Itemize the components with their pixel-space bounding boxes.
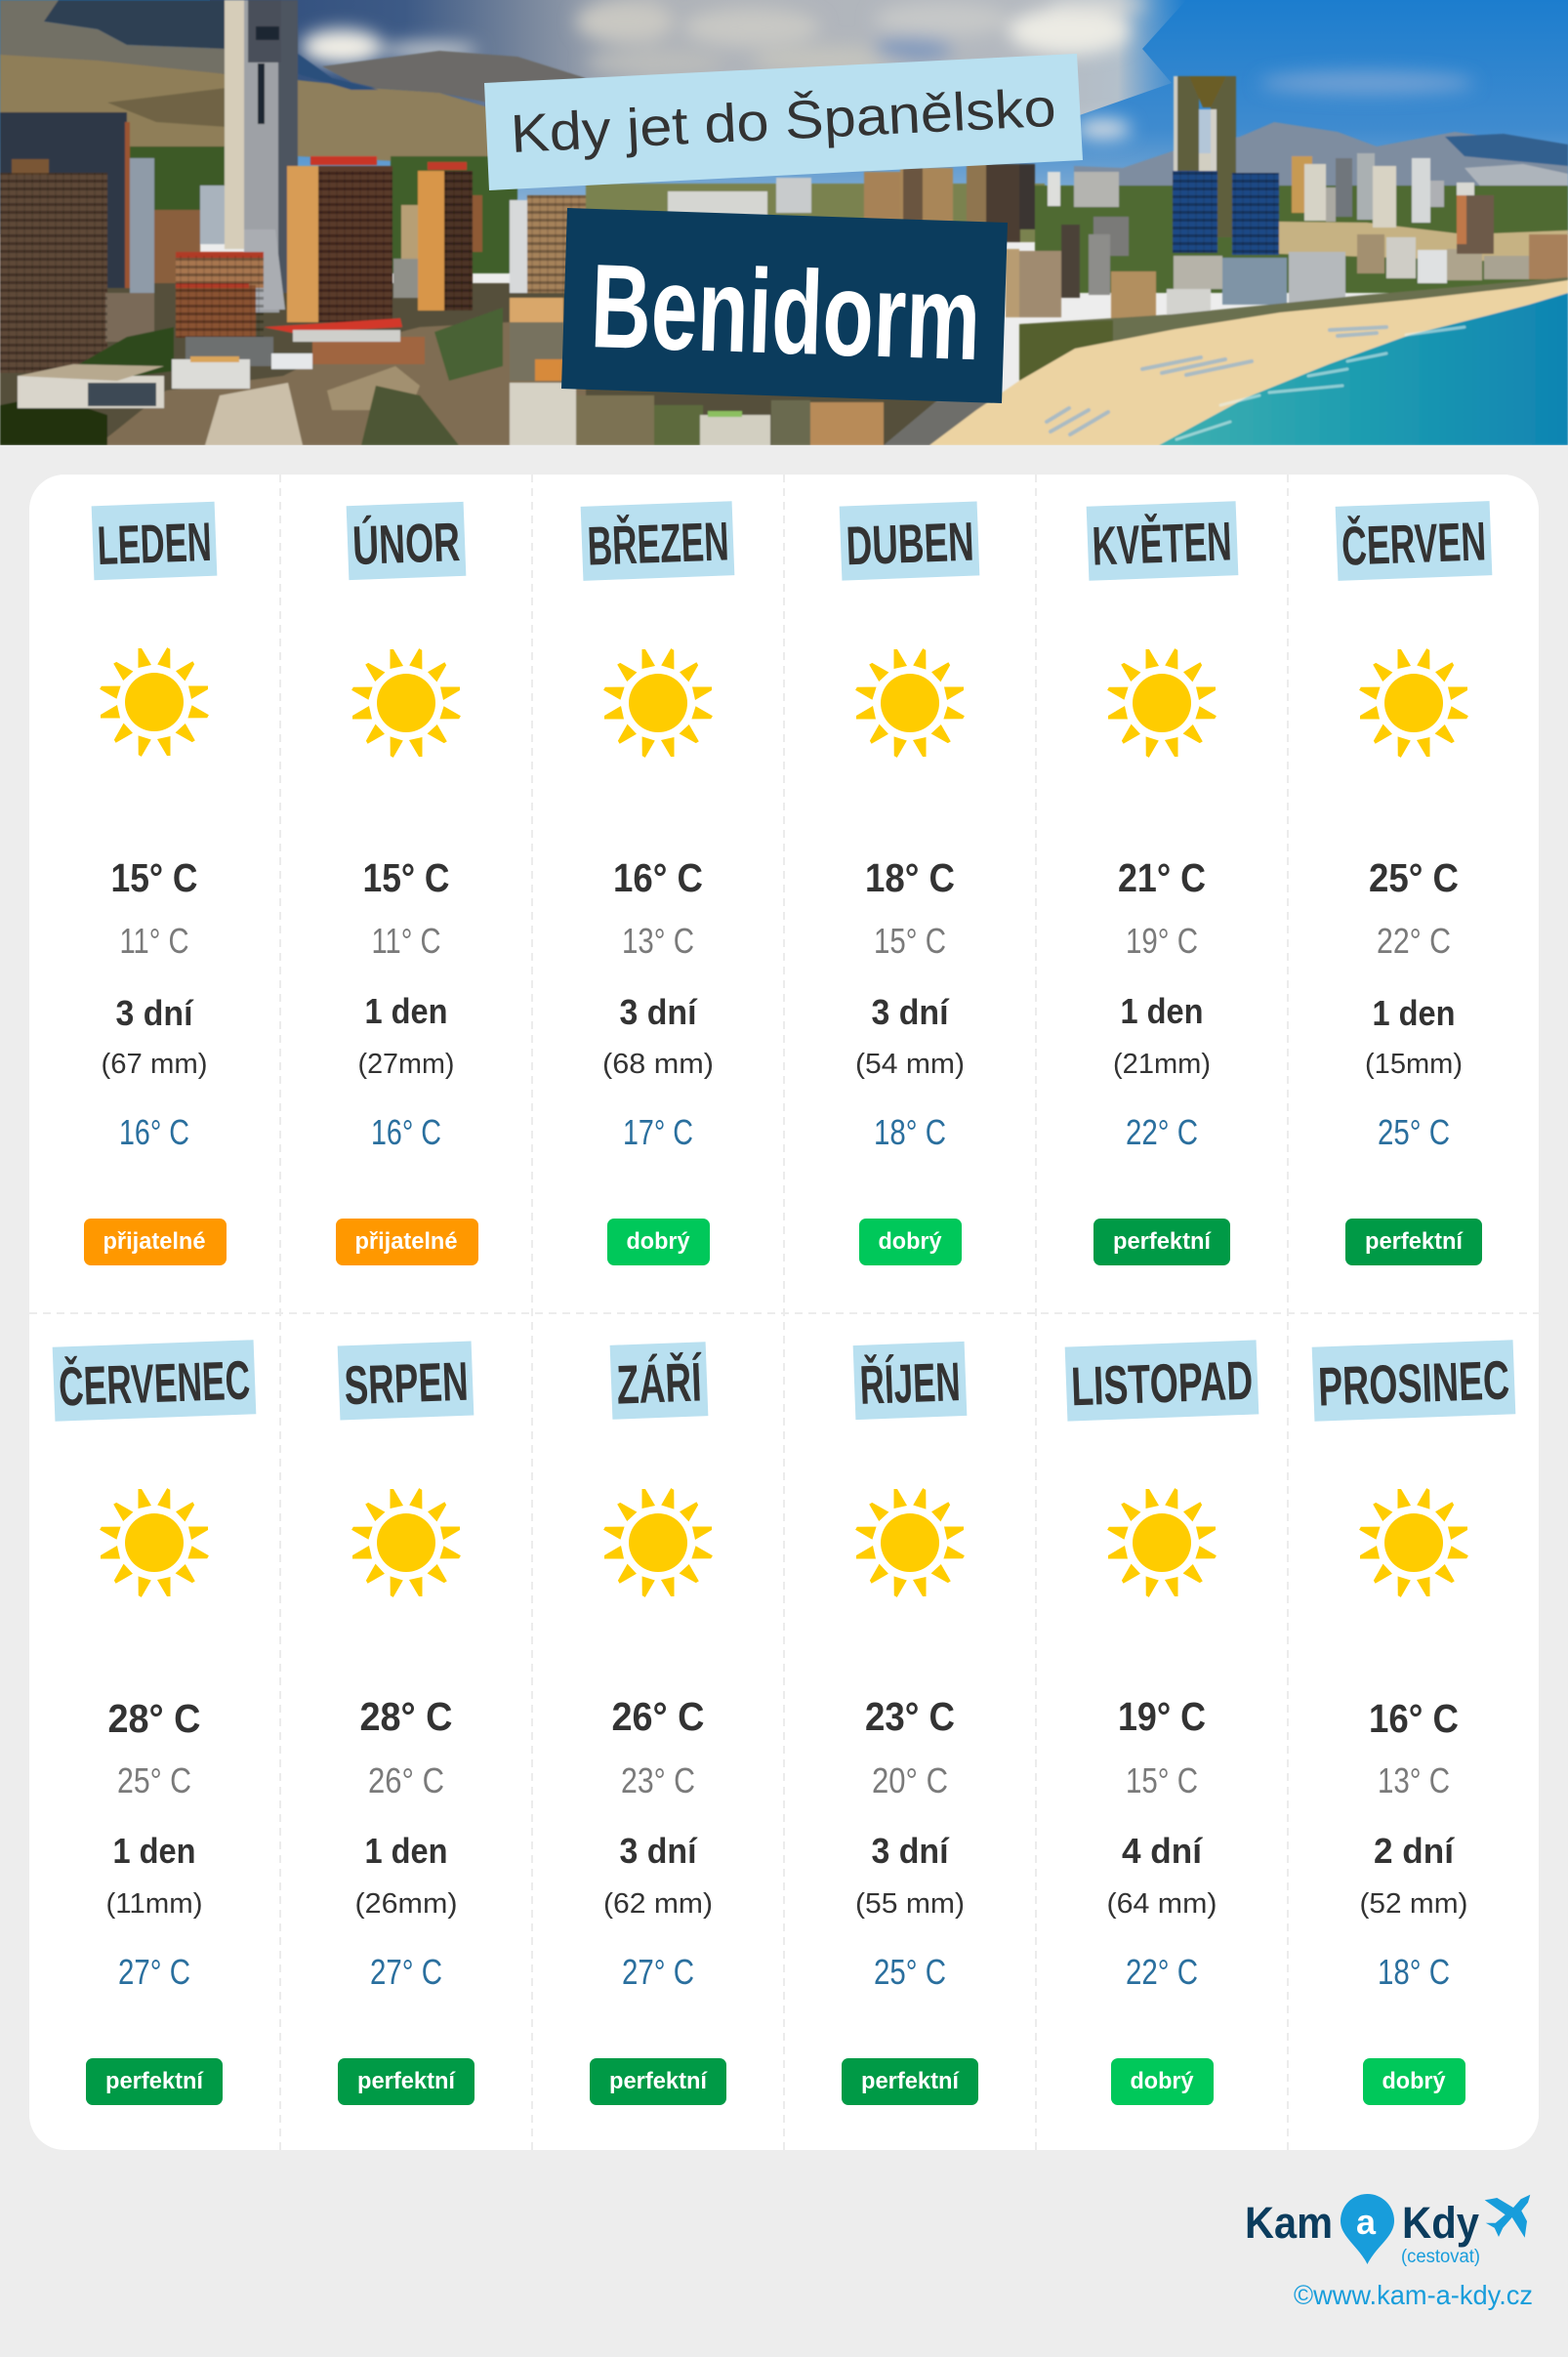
heading: DUBEN: DUBEN — [845, 511, 975, 576]
air temperature night: 23° C — [621, 1760, 695, 1800]
icon: sun — [100, 647, 209, 757]
heading: BŘEZEN: BŘEZEN — [586, 510, 730, 577]
sea temperature: 27° C — [370, 1952, 442, 1992]
sea temperature: 27° C — [622, 1952, 694, 1992]
sea — [1159, 293, 1568, 445]
rainfall: (68 mm) — [602, 1049, 714, 1080]
rating badge: dobrý — [1382, 2068, 1446, 2094]
rating badge — [336, 1219, 478, 1265]
window texture — [0, 173, 107, 373]
heading: LISTOPAD: LISTOPAD — [1070, 1349, 1254, 1417]
rating badge: perfektní — [357, 2068, 456, 2094]
heading: SRPEN — [338, 1342, 474, 1421]
heading: LEDEN — [92, 502, 217, 580]
heading: ÚNOR — [347, 502, 466, 580]
lower centre houses — [510, 298, 563, 325]
air temperature night: 25° C — [117, 1760, 191, 1800]
icon: sun — [351, 1488, 461, 1597]
month: březen — [581, 501, 734, 1265]
month: červen — [1336, 501, 1492, 1265]
rainy days: 4 dní — [1122, 1831, 1203, 1871]
air temperature day: 15° C — [363, 855, 449, 900]
sea temperature: 27° C — [118, 1952, 190, 1992]
rating badge — [1345, 1219, 1482, 1265]
tower — [225, 0, 244, 249]
rainfall: (15mm) — [1365, 1049, 1463, 1080]
beach — [929, 280, 1568, 445]
rainy days: 1 den — [365, 991, 447, 1031]
sea temperature: 22° C — [1126, 1112, 1198, 1152]
icon: sun — [603, 1488, 713, 1597]
rainy days: 2 dní — [1374, 1831, 1455, 1871]
rating badge — [1363, 2058, 1465, 2105]
rating badge: přijatelné — [103, 1228, 205, 1255]
logo word: Kam: Kam — [1245, 2198, 1333, 2248]
heading: LEDEN: LEDEN — [96, 511, 213, 576]
rating badge: perfektní — [1365, 1228, 1464, 1255]
right lower buildings — [1019, 251, 1061, 317]
rating badge: dobrý — [879, 1228, 942, 1255]
left tall buildings — [0, 112, 127, 288]
air temperature night: 15° C — [874, 921, 946, 961]
sea temperature: 22° C — [1126, 1952, 1198, 1992]
panel: monthly weather table — [29, 475, 1539, 2150]
icon: sun — [1107, 1488, 1217, 1597]
rainfall: (64 mm) — [1106, 1888, 1217, 1920]
heading: ČERVENEC: ČERVENEC — [58, 1348, 251, 1418]
centre buildings behind title — [666, 189, 769, 215]
air temperature day: 16° C — [1369, 1696, 1459, 1741]
rating badge — [842, 2058, 978, 2105]
month: září — [590, 1342, 726, 2105]
rating badge: perfektní — [609, 2068, 708, 2094]
month: prosinec — [1312, 1340, 1515, 2105]
rating badge — [1111, 2058, 1214, 2105]
icon: sun — [1107, 648, 1217, 758]
icon: sun — [603, 648, 713, 758]
rainy days: 1 den — [365, 1831, 447, 1871]
sea temperature: 16° C — [371, 1112, 441, 1152]
heading: BŘEZEN — [581, 501, 734, 581]
air temperature day: 28° C — [359, 1694, 453, 1739]
rating badge — [86, 2058, 223, 2105]
air temperature night: 11° C — [371, 921, 441, 961]
heading: ZÁŘÍ — [610, 1342, 708, 1420]
rainy days: 3 dní — [619, 992, 697, 1032]
rainy days: 3 dní — [871, 992, 949, 1032]
website link: ©www.kam-a-kdy.cz — [1294, 2280, 1533, 2310]
heading: ČERVENEC — [53, 1340, 256, 1422]
air temperature night: 19° C — [1126, 921, 1198, 961]
title: Benidorm — [561, 208, 1008, 403]
air temperature night: 11° C — [119, 921, 189, 961]
rainy days: 1 den — [1373, 993, 1455, 1033]
rainfall: (52 mm) — [1359, 1888, 1468, 1920]
rating badge: perfektní — [861, 2068, 960, 2094]
air temperature day: 19° C — [1118, 1694, 1206, 1739]
sea temperature: 18° C — [874, 1112, 946, 1152]
heading: LISTOPAD — [1065, 1340, 1259, 1422]
rainfall: (21mm) — [1113, 1049, 1211, 1080]
rainfall: (55 mm) — [855, 1888, 965, 1920]
air temperature day: 23° C — [865, 1694, 955, 1739]
orange towers — [287, 166, 318, 322]
sea temperature: 16° C — [119, 1112, 189, 1152]
icon: sun — [351, 648, 461, 758]
icon: map pin — [1341, 2194, 1394, 2264]
heading: SRPEN: SRPEN — [343, 1350, 470, 1416]
rainfall: (54 mm) — [855, 1049, 965, 1080]
rainfall: (27mm) — [357, 1049, 455, 1080]
banner: subtitle: Kdy jet do Španělsko — [510, 77, 1057, 164]
heading: KVĚTEN — [1087, 501, 1238, 581]
title: Benidorm: Benidorm — [589, 239, 982, 385]
logo word: Kdy: Kdy — [1402, 2198, 1479, 2248]
header photo: Benidorm skyline and beach — [0, 0, 1568, 445]
month: květen — [1087, 501, 1238, 1265]
rating badge: dobrý — [627, 1228, 690, 1255]
rainfall: (11mm) — [106, 1888, 202, 1920]
air temperature night: 26° C — [368, 1760, 444, 1800]
rating badge — [607, 1219, 710, 1265]
rating badge: dobrý — [1131, 2068, 1194, 2094]
icon: sun — [1359, 648, 1468, 758]
rating badge — [1093, 1219, 1230, 1265]
rainfall: (26mm) — [355, 1888, 457, 1920]
icon: sun — [855, 1488, 965, 1597]
logo: Kam a Kdy — [1245, 2194, 1530, 2267]
heading: ČERVEN — [1336, 501, 1492, 581]
icon: sun — [100, 1488, 209, 1597]
heading: ŘÍJEN: ŘÍJEN — [858, 1350, 962, 1416]
Intempo — [1174, 76, 1199, 174]
rainy days: 3 dní — [871, 1831, 949, 1871]
rainfall: (67 mm) — [102, 1049, 207, 1080]
rating badge: perfektní — [1113, 1228, 1212, 1255]
air temperature night: 13° C — [1378, 1760, 1450, 1800]
air temperature day: 15° C — [111, 855, 197, 900]
air temperature day: 21° C — [1118, 855, 1206, 900]
banner: subtitle — [484, 54, 1083, 190]
rainy days: 3 dní — [115, 993, 193, 1033]
air temperature night: 20° C — [872, 1760, 948, 1800]
air temperature night: 13° C — [622, 921, 694, 961]
rainfall: (62 mm) — [603, 1888, 713, 1920]
rating badge: perfektní — [105, 2068, 204, 2094]
icon: sun — [1359, 1488, 1468, 1597]
air temperature day: 26° C — [611, 1694, 705, 1739]
sea temperature: 25° C — [874, 1952, 946, 1992]
logo tagline: (cestovat) — [1401, 2247, 1480, 2267]
air temperature day: 25° C — [1369, 855, 1459, 900]
rainy days: 3 dní — [619, 1831, 697, 1871]
vegetation bands — [129, 145, 226, 211]
heading: ZÁŘÍ: ZÁŘÍ — [615, 1350, 704, 1416]
air temperature day: 18° C — [865, 855, 955, 900]
rating badge — [859, 1219, 962, 1265]
air temperature day: 16° C — [613, 855, 703, 900]
month: srpen — [338, 1342, 475, 2105]
rating badge — [338, 2058, 475, 2105]
icon: map pin: a — [1356, 2202, 1377, 2242]
air temperature day: 28° C — [107, 1696, 201, 1741]
heading: KVĚTEN: KVĚTEN — [1091, 510, 1233, 577]
month: listopad — [1065, 1340, 1259, 2105]
month: červenec — [53, 1340, 256, 2105]
rating badge: přijatelné — [355, 1228, 457, 1255]
rainy days: 1 den — [113, 1831, 195, 1871]
right mountains — [1074, 122, 1568, 195]
rating badge — [84, 1219, 227, 1265]
right tall towers — [1292, 156, 1312, 213]
heading: ÚNOR: ÚNOR — [351, 511, 461, 576]
sea temperature: 17° C — [623, 1112, 693, 1152]
month: leden — [84, 502, 227, 1265]
heading: ČERVEN: ČERVEN — [1341, 510, 1487, 577]
sea temperature: 18° C — [1378, 1952, 1450, 1992]
sea temperature: 25° C — [1378, 1112, 1450, 1152]
month: duben — [840, 501, 979, 1265]
heading: ŘÍJEN — [853, 1342, 967, 1420]
month: říjen — [842, 1342, 978, 2105]
month: únor — [336, 502, 478, 1265]
rainy days: 1 den — [1121, 991, 1203, 1031]
rating badge — [590, 2058, 726, 2105]
icon: sun — [855, 648, 965, 758]
left mountains — [44, 0, 227, 49]
air temperature night: 22° C — [1377, 921, 1451, 961]
icon: airplane — [1485, 2195, 1530, 2238]
air temperature night: 15° C — [1126, 1760, 1198, 1800]
lower left trees and cliff — [80, 327, 174, 375]
heading: DUBEN — [840, 501, 979, 581]
